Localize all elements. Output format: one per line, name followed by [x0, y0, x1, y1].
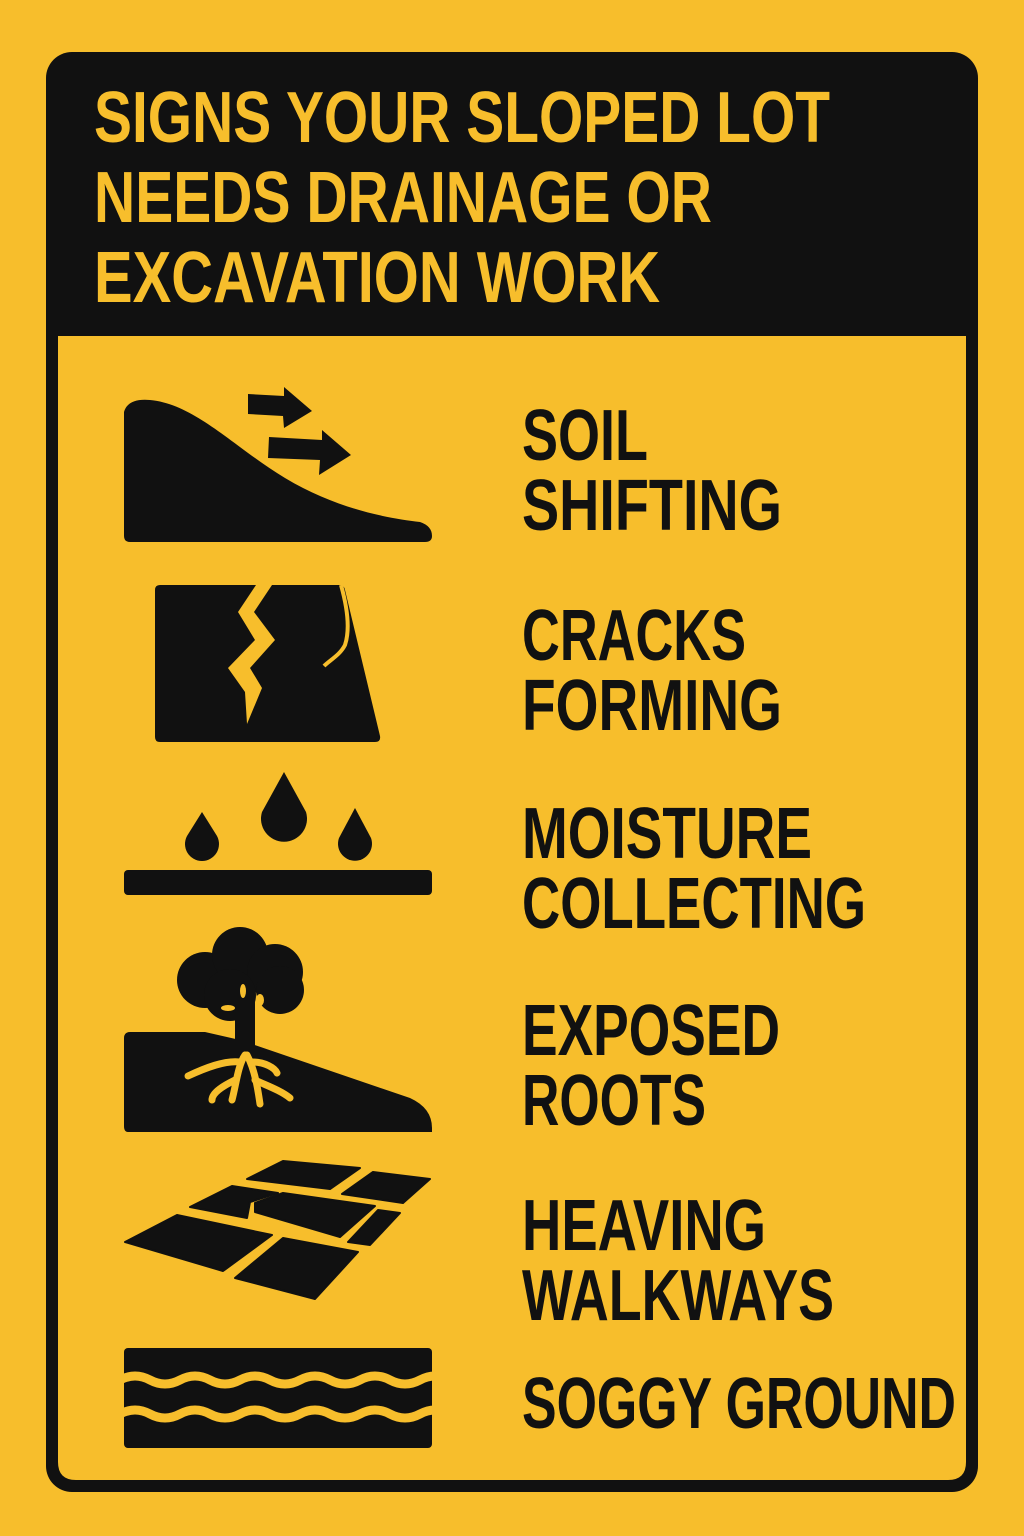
label: exposed roots: ROOTS [522, 1061, 706, 1141]
label: soil shifting: SHIFTING [522, 466, 782, 546]
label: exposed roots [522, 991, 780, 1141]
item: heaving walkways [125, 1161, 834, 1336]
icon: slope with arrows [124, 387, 432, 542]
title: SIGNS YOUR SLOPED LOT [94, 78, 830, 158]
label: cracks forming: FORMING [522, 666, 782, 746]
label: cracks forming [522, 596, 782, 746]
icon: displaced pavers [125, 1161, 430, 1299]
label: cracks forming: CRACKS [522, 596, 746, 676]
item: moisture collecting [124, 772, 866, 944]
icon: cracked slab [155, 585, 380, 742]
icon: wavy soil layers [120, 1348, 450, 1448]
item: soggy ground [120, 1348, 956, 1448]
item: soil shifting [124, 387, 782, 546]
item: exposed roots [124, 927, 780, 1141]
label: exposed roots: EXPOSED [522, 991, 780, 1071]
label: heaving walkways: WALKWAYS [522, 1256, 834, 1336]
icon: drops over ground [124, 772, 432, 895]
item: cracks forming [155, 585, 782, 746]
title: EXCAVATION WORK [94, 238, 660, 318]
label: heaving walkways [522, 1186, 834, 1336]
title: NEEDS DRAINAGE OR [94, 158, 712, 238]
label: soil shifting: SOIL [522, 396, 648, 476]
icon: tree with roots [124, 927, 432, 1132]
label: heaving walkways: HEAVING [522, 1186, 766, 1266]
label: soil shifting [522, 396, 782, 546]
label: moisture collecting: MOISTURE [522, 794, 812, 874]
label: moisture collecting [522, 794, 866, 944]
label: moisture collecting: COLLECTING [522, 864, 866, 944]
title [94, 78, 830, 318]
